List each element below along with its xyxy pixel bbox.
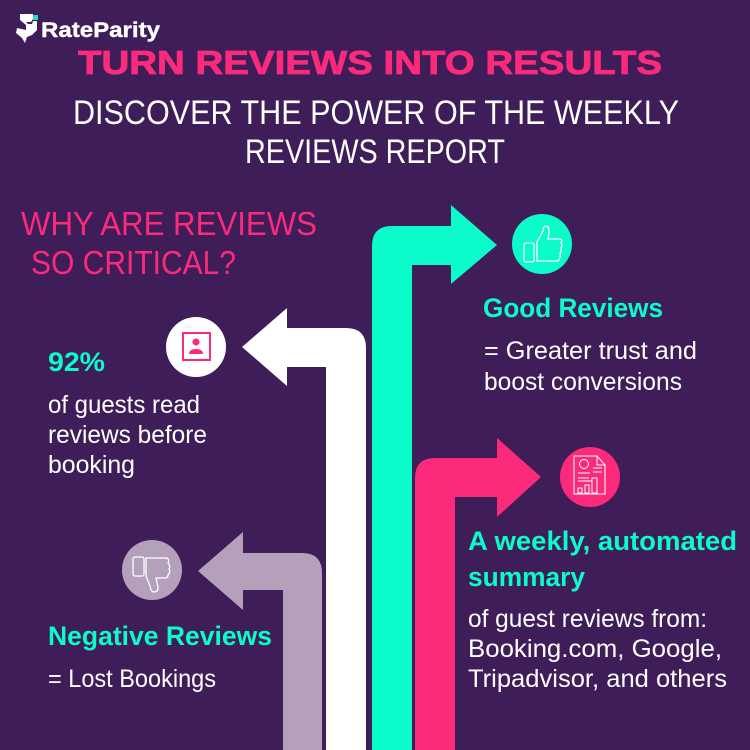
text: 92 percent of guests: of guests read xyxy=(48,391,200,419)
arrow: teal xyxy=(372,205,497,750)
heading: why are reviews so critical: WHY ARE REVIEWS xyxy=(21,205,317,242)
icon: report document xyxy=(560,447,620,507)
icon: profile xyxy=(166,317,226,377)
text: negative reviews: = Lost Bookings xyxy=(48,665,216,693)
text: weekly summary: Tripadvisor, and others xyxy=(468,665,727,693)
text: 92 percent of guests xyxy=(48,347,207,479)
text: good reviews xyxy=(483,293,697,396)
text: weekly summary: of guest reviews from: xyxy=(468,605,707,633)
logo: RateParity xyxy=(16,14,160,43)
text: negative reviews: Negative Reviews xyxy=(48,621,272,651)
heading: why are reviews so critical: SO CRITICAL? xyxy=(31,244,236,281)
arrow: mauve xyxy=(198,532,322,750)
arrow: white xyxy=(242,308,366,750)
subtitle xyxy=(73,94,679,171)
icon: thumbs down xyxy=(122,540,182,600)
text: weekly summary xyxy=(468,526,737,693)
heading: why are reviews so critical xyxy=(21,205,317,281)
text: good reviews: = Greater trust and xyxy=(484,337,697,365)
arrow: pink xyxy=(415,438,541,750)
text: good reviews: Good Reviews xyxy=(483,293,663,323)
text: 92 percent of guests: reviews before xyxy=(48,421,207,449)
icon: thumbs up xyxy=(512,214,572,274)
text: weekly summary: A weekly, automated xyxy=(468,526,737,556)
text: weekly summary: summary xyxy=(468,562,585,592)
text: 92 percent of guests: booking xyxy=(48,451,135,479)
text: good reviews: boost conversions xyxy=(484,368,682,396)
text: 92 percent of guests: 92% xyxy=(48,347,105,377)
subtitle: REVIEWS REPORT xyxy=(245,133,505,171)
title: TURN REVIEWS INTO RESULTS xyxy=(78,44,662,81)
text: weekly summary: Booking.com, Google, xyxy=(468,635,722,663)
subtitle: DISCOVER THE POWER OF THE WEEKLY xyxy=(73,94,679,132)
logo: RateParity: RateParity xyxy=(41,19,160,42)
text: negative reviews xyxy=(48,621,272,693)
